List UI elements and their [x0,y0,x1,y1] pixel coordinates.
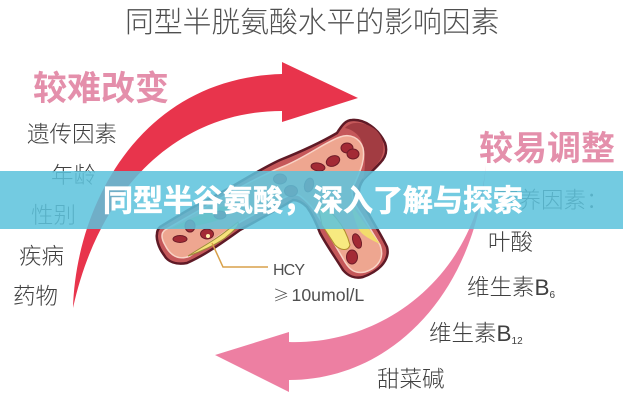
yellow plaque, left branch [188,222,238,256]
yellow plaque, lower branch [318,205,350,250]
blood vessel illustration [157,120,388,278]
list: easy-to-adjust factors [377,188,609,392]
list: hard-to-change factors: 性别 [31,203,76,228]
HCY label: HCY [273,262,305,279]
arrow: pink, easy to adjust [215,165,486,392]
list: easy-to-adjust factors: 6 [550,290,556,301]
green plaque, left branch [172,204,232,228]
list: easy-to-adjust factors: 维生素B [429,321,512,346]
list: easy-to-adjust factors: 维生素B [467,275,550,300]
list: hard-to-change factors: 年龄 [51,163,96,188]
HCY marker dot [206,234,210,238]
list: hard-to-change factors: 药物 [13,284,58,309]
HCY label [273,262,364,306]
list: easy-to-adjust factors: 甜菜碱 [377,367,445,392]
banner title: 同型半谷氨酸，深入了解与探索 [103,185,523,218]
title: 同型半胱氨酸水平的影响因素 [125,7,499,39]
heading: hard to change: 较难改变 [33,70,169,108]
vessel end cap [345,123,383,180]
yellow plaque, lower branch right [352,205,380,244]
list: hard-to-change factors: 疾病 [19,244,64,269]
arrow: red, hard to change [73,62,358,308]
vessel lumen [162,136,382,273]
list: hard-to-change factors: 遗传因素 [27,122,117,147]
heading: easy to adjust: 较易调整 [479,130,615,168]
HCY leader line [212,243,268,267]
HCY label: 10umol/L [292,285,364,305]
list: easy-to-adjust factors: 12 [512,336,523,347]
list: hard-to-change factors [13,122,117,309]
banner [0,171,623,229]
red blood cells [173,143,363,264]
vessel outer wall [157,120,388,278]
HCY label: ≥ [273,282,289,306]
list: easy-to-adjust factors: 叶酸 [488,230,533,255]
list: easy-to-adjust factors: 营养因素： [496,188,609,213]
